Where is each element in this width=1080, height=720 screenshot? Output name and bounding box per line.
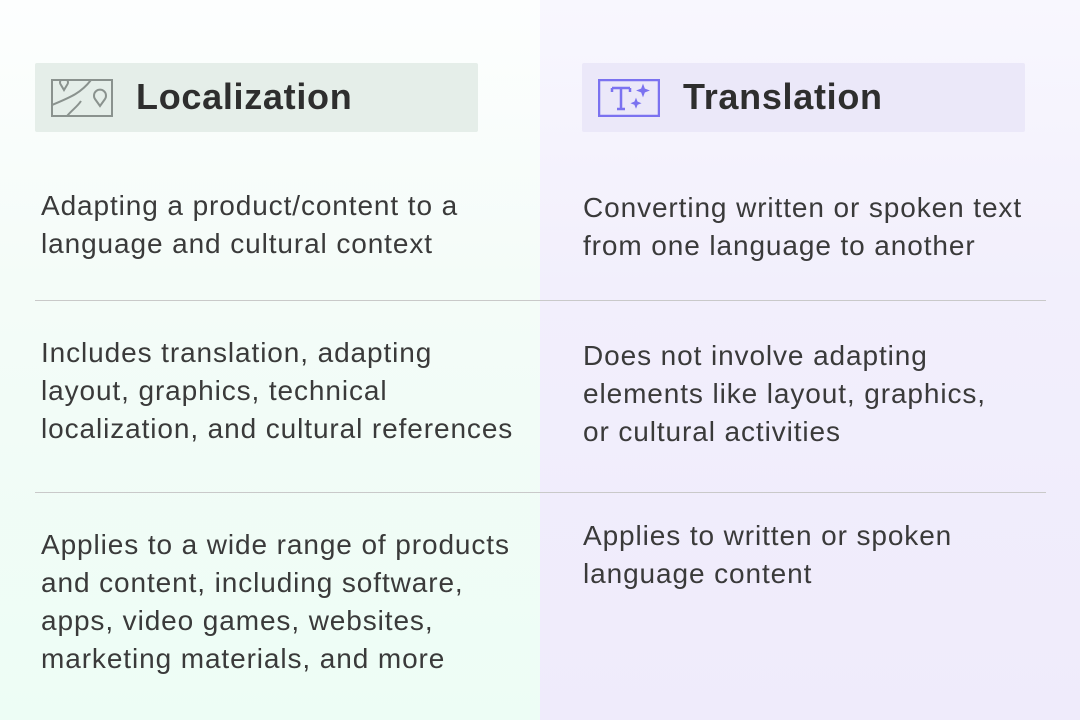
text: translation row 2: Does not involve adapting bbox=[583, 340, 928, 371]
text: localization row 2 bbox=[41, 337, 513, 444]
text: localization row 3: Applies to a wide range of products bbox=[41, 529, 510, 560]
text: translation row 3: Applies to written or spoken bbox=[583, 520, 952, 551]
text: translation row 1: from one language to another bbox=[583, 230, 976, 261]
text: localization row 3: marketing materials, and more bbox=[41, 643, 445, 674]
header: Translation bbox=[582, 63, 1025, 132]
text: localization row 1: Adapting a product/content to a bbox=[41, 190, 458, 221]
text: localization row 3: apps, video games, websites, bbox=[41, 605, 434, 636]
text: localization row 2: Includes translation, adapting bbox=[41, 337, 432, 368]
text: localization row 2: localization, and cultural references bbox=[41, 413, 513, 444]
text: localization row 1 bbox=[41, 190, 458, 259]
text: localization row 3 bbox=[41, 529, 510, 674]
text: localization row 1: language and cultural context bbox=[41, 228, 433, 259]
text: localization row 2: layout, graphics, technical bbox=[41, 375, 387, 406]
title: Translation: Translation bbox=[683, 76, 883, 117]
text: translation row 1: Converting written or spoken text bbox=[583, 192, 1022, 223]
icon: map bbox=[51, 79, 113, 117]
text: translation row 2: elements like layout, graphics, bbox=[583, 378, 986, 409]
icon: text sparkle bbox=[598, 79, 660, 117]
text: translation row 2 bbox=[583, 340, 986, 447]
header: Localization bbox=[35, 63, 478, 132]
text: translation row 2: or cultural activities bbox=[583, 416, 841, 447]
text: localization row 3: and content, including software, bbox=[41, 567, 464, 598]
title: Localization: Localization bbox=[136, 76, 352, 117]
text: translation row 3: language content bbox=[583, 558, 812, 589]
text: translation row 3 bbox=[583, 520, 952, 589]
text: translation row 1 bbox=[583, 192, 1022, 261]
